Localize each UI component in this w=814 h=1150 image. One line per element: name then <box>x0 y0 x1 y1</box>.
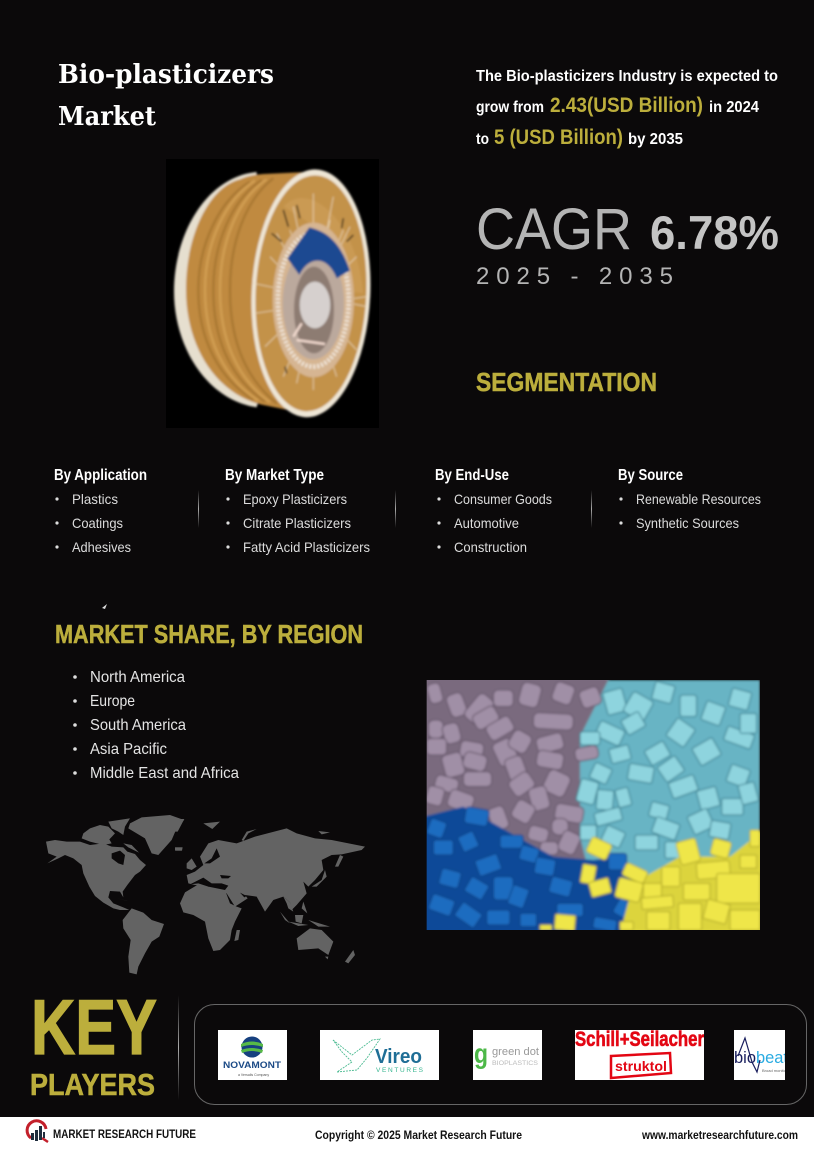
logo: biobeat <box>734 1030 785 1080</box>
region list: North America <box>90 669 185 686</box>
logo: novamont <box>218 1030 287 1080</box>
footer brand name: MARKET RESEARCH FUTURE <box>53 1127 196 1141</box>
title: Bio-plasticizers <box>58 60 274 90</box>
column: by application <box>54 467 147 555</box>
column: by end-use: Consumer Goods <box>454 491 552 507</box>
logo: schill + seilacher struktol <box>575 1028 704 1080</box>
market growth statement: grow from <box>476 99 544 116</box>
market growth statement: by 2035 <box>628 131 683 148</box>
column: by market type: Citrate Plasticizers <box>243 515 351 531</box>
key players heading <box>30 983 157 1102</box>
spool label <box>287 227 350 278</box>
footer <box>0 1117 814 1150</box>
market growth statement <box>476 68 778 149</box>
panel: key players logos <box>194 1004 806 1104</box>
column: by application: By Application <box>54 467 147 484</box>
spool front flange <box>246 167 376 420</box>
logo: schill + seilacher struktol: struktol <box>615 1058 667 1074</box>
market growth statement: The Bio-plasticizers Industry is expected to <box>476 68 778 85</box>
key players heading: KEY <box>31 983 157 1071</box>
logo: biobeat: bio <box>734 1048 756 1067</box>
logo: biobeat: Broad monitoring <box>762 1068 792 1073</box>
icon: filament spool photo <box>166 159 379 428</box>
column: by source: Renewable Resources <box>636 491 761 507</box>
column: by end-use: Automotive <box>454 515 519 531</box>
column: by source: By Source <box>618 467 683 484</box>
title: Market <box>58 102 156 132</box>
logo: green dot bioplastics: g <box>474 1038 488 1069</box>
column: by end-use: By End-Use <box>435 467 509 484</box>
column: by market type: By Market Type <box>225 467 324 484</box>
CAGR figure: 2025 - 2035 <box>476 263 673 290</box>
region list <box>73 669 239 782</box>
market growth statement: 2.43(USD Billion) <box>550 94 703 117</box>
title <box>58 60 274 132</box>
column: by market type: Fatty Acid Plasticizers <box>243 539 370 555</box>
logo: vireo ventures: VENTURES <box>376 1067 424 1074</box>
world map <box>46 815 365 974</box>
key players heading: PLAYERS <box>30 1068 155 1102</box>
region list: South America <box>90 717 186 734</box>
column: by market type <box>225 467 370 555</box>
photo: plastic pellets <box>423 677 763 933</box>
spool back rim <box>174 172 263 407</box>
column: by end-use <box>435 467 552 555</box>
market growth statement: in 2024 <box>709 99 759 116</box>
spool hub <box>294 267 334 353</box>
logo: schill + seilacher struktol: Schill+Seilacher <box>575 1028 704 1051</box>
map: americas and greenland <box>46 815 184 974</box>
footer copyright: Copyright © 2025 Market Research Future <box>315 1128 522 1142</box>
market growth statement: to <box>476 131 489 148</box>
logo: biobeat: beat <box>756 1048 788 1067</box>
spool filament body <box>186 172 313 415</box>
CAGR figure: 6.78% <box>650 206 779 259</box>
section heading: market share by region: MARKET SHARE, BY REGION <box>55 619 363 649</box>
column: by market type: Epoxy Plasticizers <box>243 491 347 507</box>
logo: vireo ventures <box>320 1030 439 1080</box>
pellets: light blue <box>576 681 759 858</box>
logo: novamont: a Versalis Company <box>238 1073 269 1077</box>
CAGR figure: CAGR <box>476 197 632 262</box>
pellets: yellow <box>540 830 763 933</box>
market growth statement: 5 (USD Billion) <box>494 126 623 149</box>
logo: novamont: NOVAMONT <box>223 1060 281 1071</box>
icon: market research future logo <box>27 1121 48 1142</box>
region list: Middle East and Africa <box>90 765 239 782</box>
column: by end-use: Construction <box>454 539 527 555</box>
logo: green dot bioplastics: BIOPLASTICS <box>492 1061 538 1067</box>
CAGR figure <box>476 197 779 290</box>
spool spokes <box>253 193 367 390</box>
map: europe, africa, asia, oceania <box>175 819 365 963</box>
column: by source: Synthetic Sources <box>636 515 739 531</box>
column: by application: Coatings <box>72 515 123 531</box>
pellets: purple <box>423 677 610 863</box>
pellets: dark blue <box>423 806 683 933</box>
column: by application: Adhesives <box>72 539 131 555</box>
logo: vireo ventures: Vireo <box>375 1046 422 1068</box>
region list: Asia Pacific <box>90 741 167 758</box>
region list: Europe <box>90 693 135 710</box>
section heading: segmentation: SEGMENTATION <box>476 367 657 397</box>
column: by application: Plastics <box>72 491 118 507</box>
logo: green dot bioplastics <box>473 1030 542 1080</box>
logo: green dot bioplastics: green dot <box>492 1046 539 1058</box>
column: by source <box>618 467 761 531</box>
